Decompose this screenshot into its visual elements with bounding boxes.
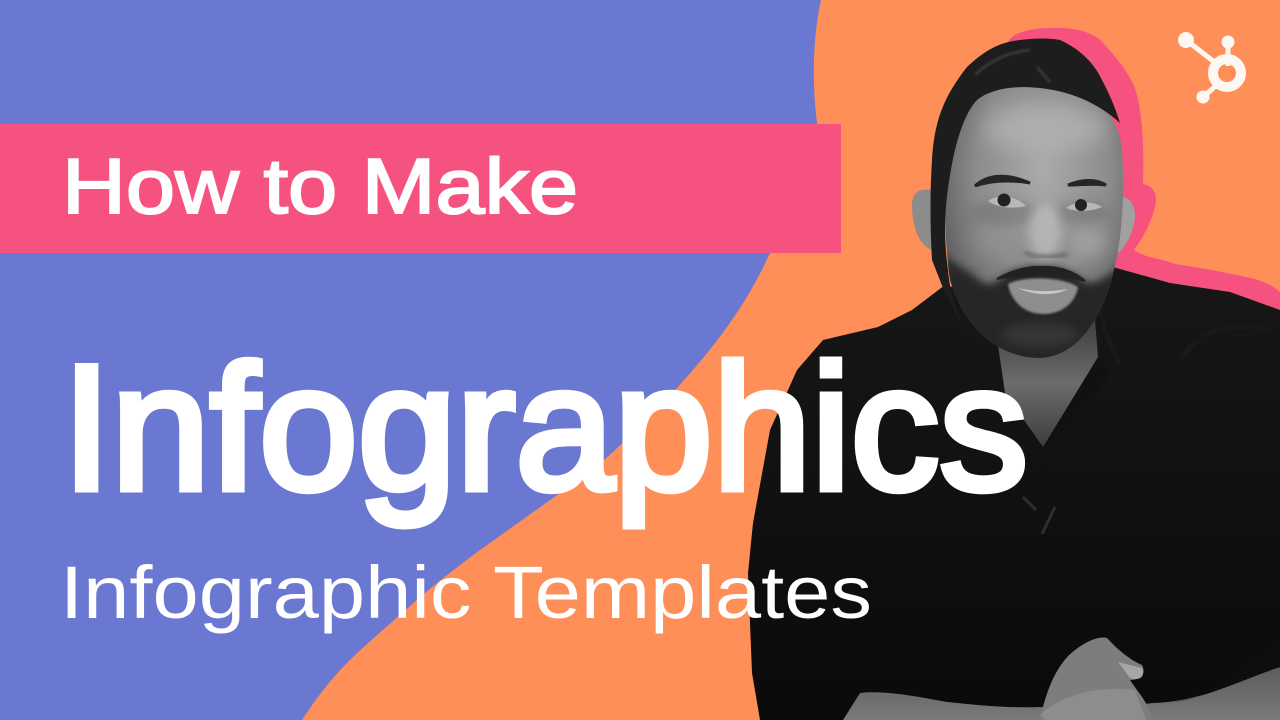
hair xyxy=(930,38,1120,335)
collar shadow xyxy=(1041,357,1110,470)
right ear xyxy=(1117,197,1135,254)
eyebrows xyxy=(975,176,1030,186)
shirt xyxy=(748,265,1280,720)
neck xyxy=(998,320,1098,447)
presenter photo illustration xyxy=(748,38,1280,720)
mouth teeth xyxy=(1018,288,1068,294)
face shading xyxy=(945,104,1122,370)
left ear xyxy=(912,190,932,250)
forehead highlight xyxy=(983,104,1107,152)
hands xyxy=(1040,638,1152,720)
beard texture xyxy=(1006,324,1074,346)
lips xyxy=(1008,278,1078,314)
pink triangle beside arm xyxy=(1227,603,1262,664)
pink cutout outline behind presenter xyxy=(1008,28,1280,330)
beard xyxy=(947,254,1115,358)
left eye xyxy=(988,194,1026,208)
eye socket shadow xyxy=(973,200,1037,226)
shirt folds xyxy=(1098,300,1270,365)
icon: HubSpot logo xyxy=(1178,32,1241,104)
forearms xyxy=(843,667,1280,720)
right eye xyxy=(1066,199,1102,211)
heading: How to Make: How to Make xyxy=(62,142,578,230)
head and face xyxy=(945,84,1123,358)
hair parting xyxy=(975,50,1050,82)
purple blob background xyxy=(0,0,821,720)
pink banner xyxy=(0,124,841,253)
nose highlight xyxy=(1029,204,1061,260)
nose underside xyxy=(1025,252,1068,257)
subheading: Infographic Templates: Infographic Templates xyxy=(60,551,872,634)
moustache xyxy=(997,267,1085,281)
sleeve wrinkle over arm xyxy=(1154,640,1280,704)
lapel microphone xyxy=(1023,497,1055,534)
cheek highlight xyxy=(1073,230,1107,256)
heading: Infographics: Infographics xyxy=(62,328,1028,527)
